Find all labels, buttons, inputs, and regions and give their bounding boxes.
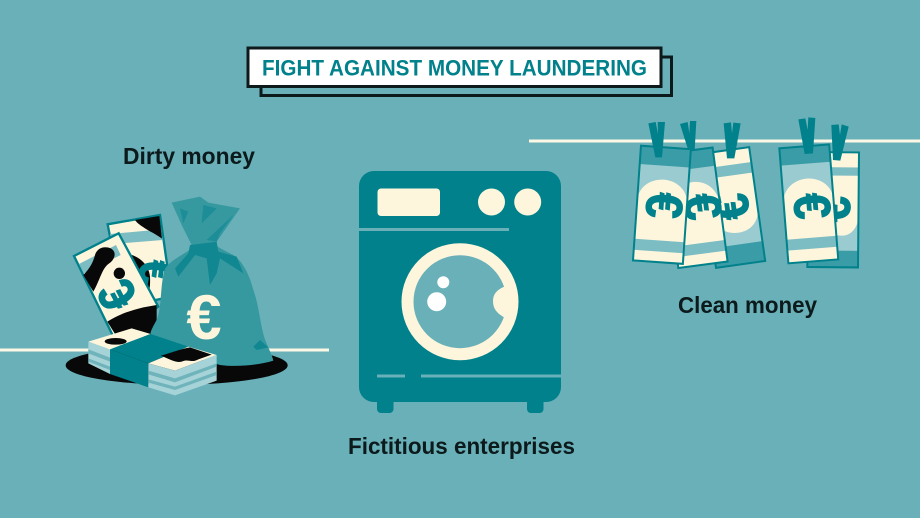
label: dirty money: Dirty money (123, 143, 255, 169)
banknote 3: € (702, 190, 761, 224)
clothes pegs (648, 117, 849, 161)
front banknote (74, 233, 158, 337)
door (402, 243, 518, 360)
label: fictitious enterprises: Fictitious enterprises (348, 433, 575, 459)
banknote 2: € (672, 190, 732, 223)
display (378, 188, 440, 216)
door handle (493, 287, 512, 317)
title text: FIGHT AGAINST MONEY LAUNDERING (262, 56, 647, 80)
illustration: dirty money (66, 197, 288, 395)
money bag (150, 197, 273, 366)
knobs (478, 188, 505, 216)
banknote 1 (631, 146, 696, 264)
label: clean money: Clean money (678, 292, 817, 318)
banknote stack (88, 328, 217, 395)
clothesline (529, 140, 920, 142)
washing machine (359, 171, 561, 413)
banknote 1: € (634, 190, 693, 220)
machine body (359, 171, 561, 402)
front banknote: € (87, 270, 149, 320)
bubbles (437, 276, 449, 288)
title box (248, 48, 672, 96)
money bag: € (186, 283, 222, 353)
back banknote: € (127, 257, 186, 289)
banknote 5: € (782, 191, 840, 221)
back banknote (108, 215, 186, 307)
banknote 5 (778, 144, 844, 263)
banknote 3 (695, 147, 768, 269)
banknote 4: € (805, 196, 861, 222)
illustration: clean money (631, 117, 862, 269)
feet (377, 396, 394, 413)
ground line (0, 348, 329, 352)
banknote 2 (663, 146, 737, 268)
hole (66, 346, 288, 385)
banknote 4 (804, 152, 862, 267)
